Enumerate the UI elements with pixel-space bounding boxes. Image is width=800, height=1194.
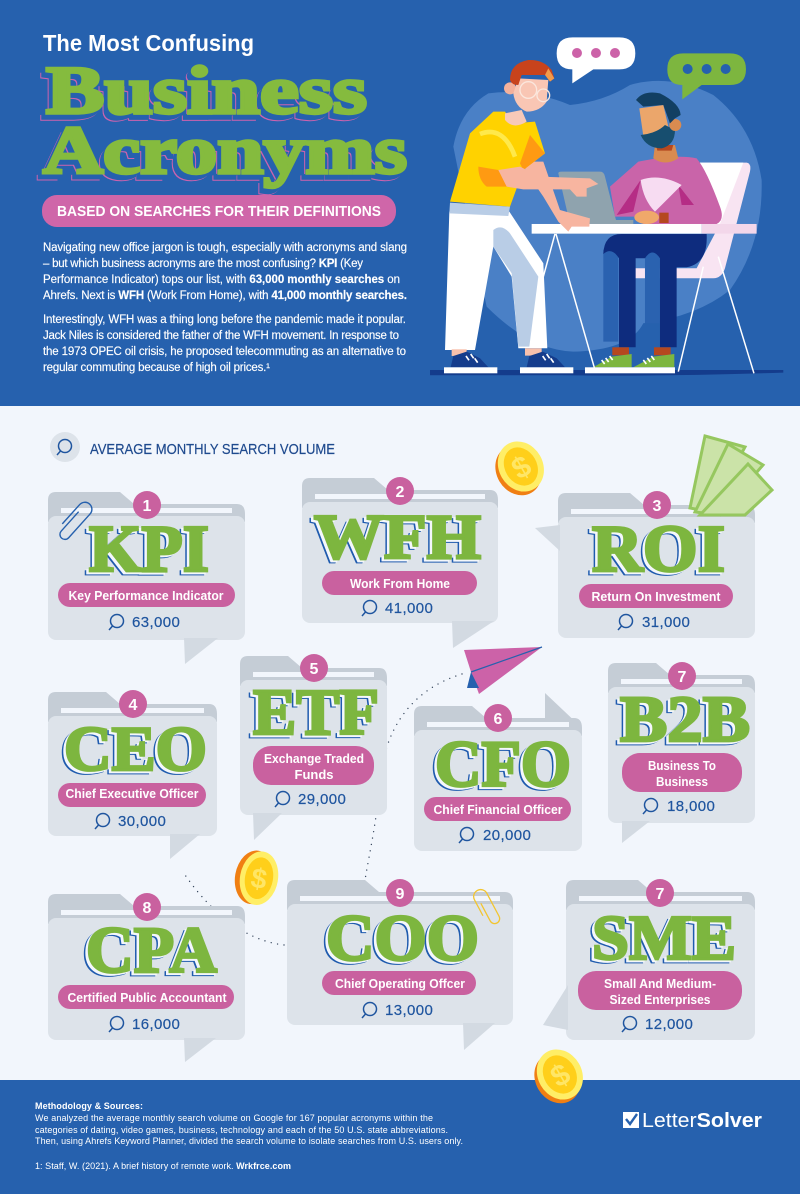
search volume: 31,000 [642,614,690,631]
subtitle pill [42,195,396,227]
search volume [459,827,531,844]
pill label [622,753,742,792]
search volume: 13,000 [385,1002,433,1019]
acronym: SME [592,902,736,973]
rank badge: 3 [653,498,662,515]
icon: coin bottom [524,1041,593,1112]
card 3: ROI [535,436,772,638]
header panel [0,0,800,406]
title line: acronyms: Acronyms [43,112,407,188]
title [43,30,407,188]
laptop [558,172,633,224]
card 7: B2B [608,662,755,843]
illustration: two colleagues at a desk [430,37,783,376]
intro text [43,242,407,374]
ground shadow [430,370,783,376]
icon: coin bottom: $ [545,1057,576,1094]
pill label: Exchange Traded [264,751,364,766]
pill label [322,971,476,995]
man standing: pointing arm [498,167,598,197]
logo text: LetterSolver [642,1110,762,1132]
folder [48,492,245,664]
pill label: Business [656,774,708,789]
acronym: WFH [314,501,481,572]
intro text: the 1973 OPEC oil crisis, he proposed telecommuting as an alternative to [43,346,406,358]
table top [532,224,757,234]
rank badge [643,491,671,519]
rank badge: 8 [143,900,152,917]
table legs [543,234,754,373]
card 1: KPI [48,491,245,664]
acronym: CEO [64,713,207,784]
card 6: CFO [414,693,582,851]
search volume [362,1002,433,1019]
pill label [58,985,234,1009]
search volume: 18,000 [667,798,715,815]
pill label: Sized Enterprises [610,992,710,1007]
rank badge: 7 [656,886,665,903]
folder back [558,493,755,523]
footer panel [0,1080,800,1194]
folder [302,478,498,648]
pill label: Chief Operating Offcer [335,976,465,991]
acronym: B2B [620,683,750,756]
speech bubble: green [667,53,746,99]
man standing: shirt [450,112,545,207]
man standing: head [504,60,554,125]
subtitle pill: BASED ON SEARCHES FOR THEIR DEFINITIONS [57,203,381,220]
man standing: legs [445,203,547,350]
rank badge: 7 [678,669,687,686]
search volume: 41,000 [385,600,433,617]
search volume [618,614,690,631]
intro text: Interestingly, WFH was a thing long before the pandemic made it popular. [43,314,406,326]
methodology and sources: Methodology & Sources: [35,1101,143,1111]
folder [48,692,217,859]
pill label [579,584,733,608]
search volume [622,1016,693,1033]
intro text: – but which business acronyms are the most confusing? KPI (Key [43,258,363,270]
pill label [253,746,374,785]
search volume [643,798,715,815]
pill label: Work From Home [350,576,450,591]
man seated: sweater details [617,178,694,224]
man standing: shoes [444,348,573,373]
pill label: Business To [648,758,716,773]
folder [543,880,755,1040]
search volume [95,813,166,830]
icon: paperclip [471,887,501,927]
pill label [322,571,477,595]
rank badge: 5 [310,661,319,678]
search volume: 12,000 [645,1016,693,1033]
card 5: ETF [240,654,387,840]
folder [240,656,387,840]
search volume: 20,000 [483,827,531,844]
rank badge [133,491,161,519]
acronym: ETF [253,676,379,749]
pill label: Key Performance Indicator [68,588,224,603]
title line: the most confusing: The Most Confusing [43,30,254,56]
rank badge: 9 [396,886,405,903]
icon: coin top [485,433,554,504]
title line: business: Business [46,52,367,128]
methodology and sources: We analyzed the average monthly search volume on Google for 167 popular acronyms within the [35,1113,433,1123]
blob backdrop [453,81,762,352]
pill label [58,583,235,607]
rank badge [133,893,161,921]
search volume: 16,000 [132,1016,180,1033]
acronym: COO [326,902,479,975]
folder [414,693,582,851]
folder [48,894,245,1062]
acronym: KPI [89,512,209,586]
icon: search [50,432,80,462]
pill label: Certified Public Accountant [68,990,227,1005]
intro text: Navigating new office jargon is tough, especially with acronyms and slang [43,242,407,254]
man standing: far arm [525,162,590,232]
chair [635,163,750,278]
pill label: Chief Financial Officer [434,802,562,817]
rank badge [119,690,147,718]
icon: paperclip [55,499,95,541]
section heading: average monthly search volume [50,432,335,462]
icon: banknotes [690,436,772,515]
methodology and sources: 1: Staff, W. (2021). A brief history of remote work. Wrkfrce.com [35,1161,291,1171]
man seated: trousers [603,234,707,347]
pill label: Small And Medium- [604,976,716,991]
pill label [424,797,571,821]
search volume: 29,000 [298,791,346,808]
pill label: Chief Executive Officer [66,786,198,801]
heading text: AVERAGE MONTHLY SEARCH VOLUME [90,441,335,458]
icon: coin top: $ [506,449,537,486]
rank badge: 2 [396,484,405,501]
search volume: 63,000 [132,614,180,631]
intro text: Performance Indicator) tops our list, with 63,000 monthly searches on [43,274,400,286]
acronym: CPA [86,914,217,987]
rank badge [646,879,674,907]
folder [608,663,755,843]
rank badge: 6 [494,711,503,728]
pill label [58,783,206,807]
man seated: back legs [603,250,660,342]
intro text: regular commuting because of high oil prices.¹ [43,362,270,374]
search volume [275,791,346,808]
methodology and sources [35,1101,463,1171]
card 8: CPA [48,893,245,1062]
search volume [109,614,180,631]
icon: coin middle: $ [249,862,270,895]
methodology and sources: categories of dating, video games, business, technology and each of the 50 U.S. state abbreviations. [35,1125,448,1135]
intro text: Ahrefs. Next is WFH (Work From Home), with 41,000 monthly searches. [43,290,407,302]
intro text: Jack Niles is considered the father of the WFH movement. In response to [43,330,399,342]
pill label: Funds [294,767,334,782]
card 4: CEO [48,690,217,859]
man seated: shoes [585,347,675,373]
search volume: 30,000 [118,813,166,830]
speech bubble: white [557,37,635,83]
folder [287,880,513,1050]
search volume [362,600,433,617]
rank badge: 4 [129,697,138,714]
dotted flight path [183,674,462,945]
pill label [578,971,742,1010]
icon: coin middle [231,847,282,908]
man seated: head [636,92,681,162]
icon: paper plane [464,647,542,694]
rank badge: 1 [143,498,152,515]
card 9: COO [287,879,513,1050]
icon: checkbox [623,1112,639,1128]
rank badge [668,662,696,690]
logo: LetterSolver [623,1110,762,1132]
rank badge [484,704,512,732]
rank badge [300,654,328,682]
man seated: sweater [610,157,722,224]
acronym: CFO [435,728,571,801]
rank badge [386,879,414,907]
card 2: WFH [302,477,498,648]
methodology and sources: Then, using Ahrefs Keyword Planner, divided the search volume to isolate searches from U.S. users only. [35,1136,463,1146]
card 10: SME [543,879,755,1040]
rank badge [386,477,414,505]
search volume [109,1016,180,1033]
folder front [535,517,755,638]
pill label: Return On Investment [592,589,721,604]
acronym: ROI [592,512,725,586]
